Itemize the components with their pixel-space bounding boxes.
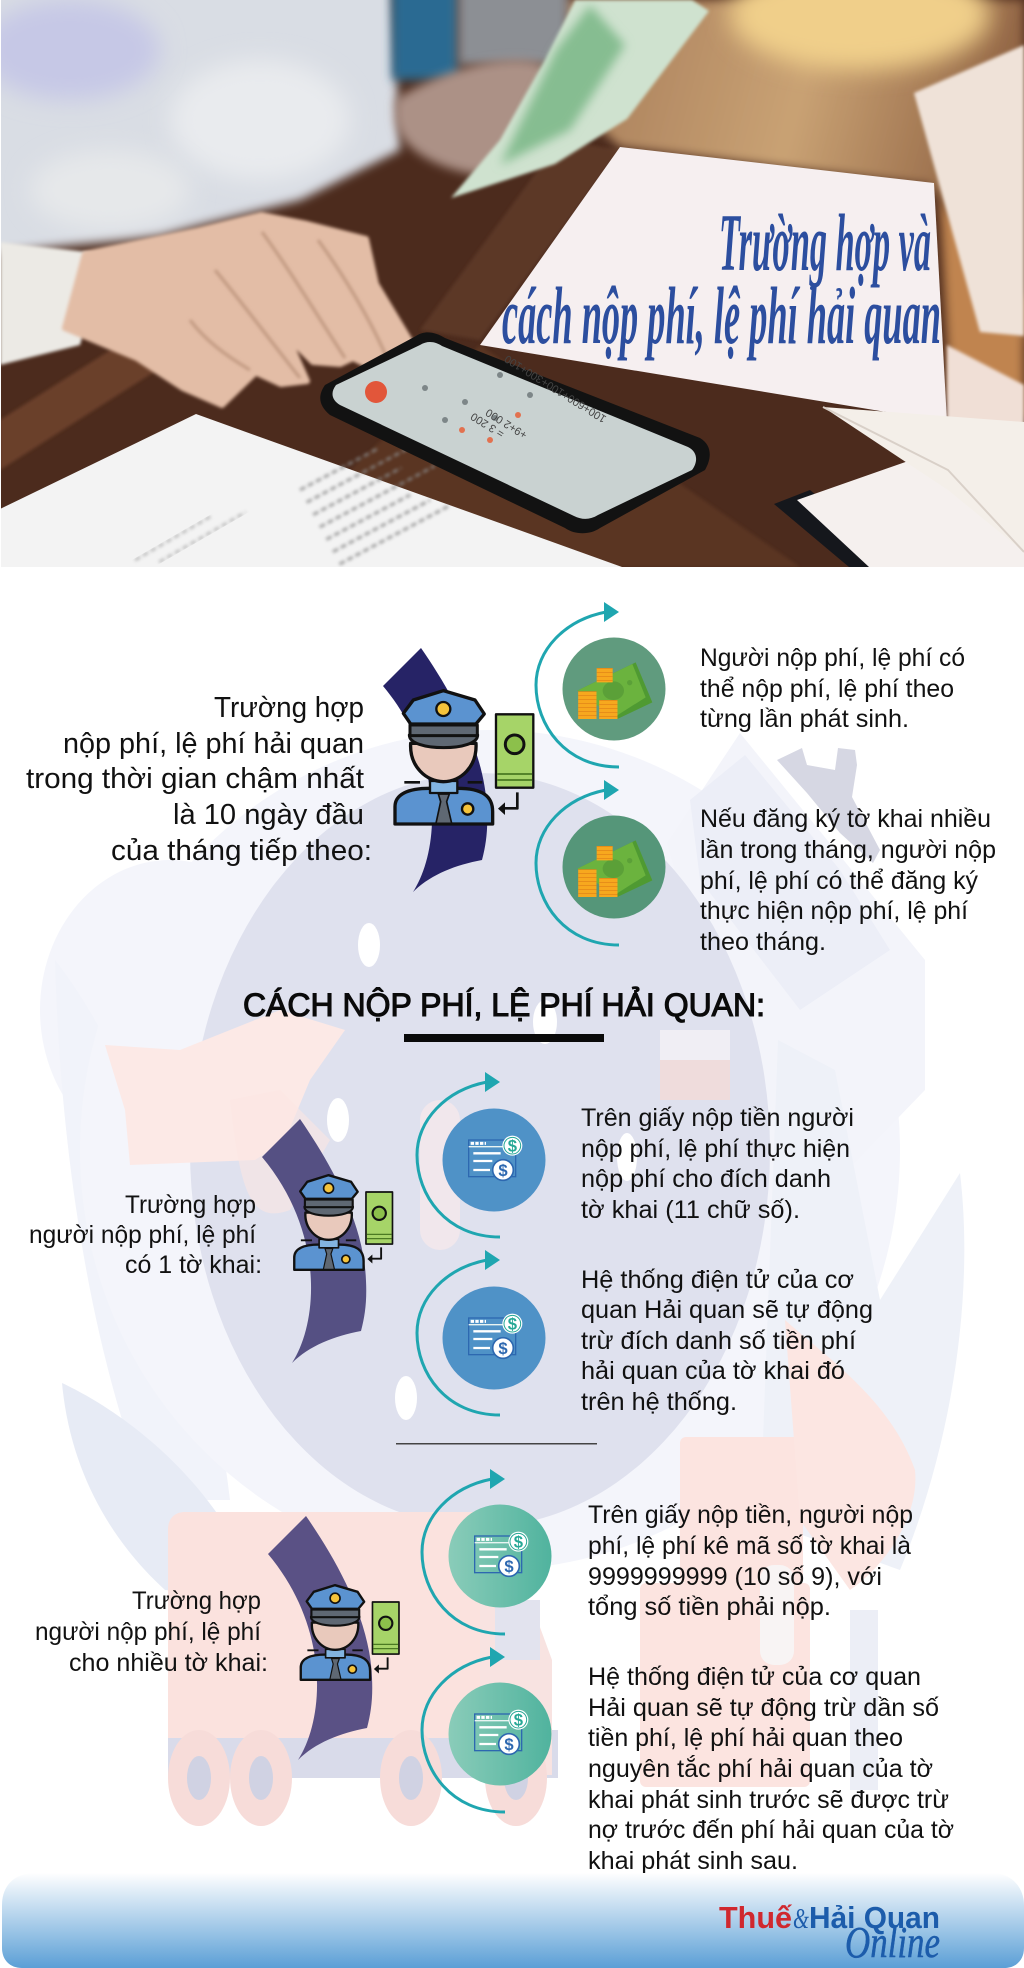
arrow arc 1 <box>536 602 619 767</box>
text: multiple declarations case: người nộp phí, lệ phí <box>35 1618 261 1646</box>
text: monthly option: phí, lệ phí có thể đăng ký <box>700 867 978 895</box>
text: one declaration case: người nộp phí, lệ phí <box>29 1221 256 1249</box>
text: automatic deduction for multiple declarations: nợ trước đến phí hải quan của tờ <box>588 1816 954 1844</box>
smartphone <box>320 332 710 533</box>
text: payment slip for multiple declarations: tổng số tiền phải nộp. <box>588 1593 831 1621</box>
arrow arc 2 <box>536 780 619 945</box>
text: automatic deduction for multiple declarations <box>588 1663 954 1875</box>
text: timing case: trong thời gian chậm nhất <box>26 763 364 795</box>
text: payment slip for one declaration: nộp phí cho đích danh <box>581 1165 831 1193</box>
ribbon behind officer 2 <box>262 1119 366 1363</box>
text: timing case: là 10 ngày đầu <box>173 799 364 831</box>
icon: money circle 2 <box>562 816 666 918</box>
text: option per occurrence <box>700 644 965 733</box>
text: option per occurrence: thể nộp phí, lệ phí theo <box>700 675 954 703</box>
icon: document circle 1 <box>442 1108 546 1212</box>
text: automatic deduction for multiple declarations: khai phát sinh trước sẽ được trừ <box>588 1786 949 1814</box>
text: option per occurrence: Người nộp phí, lệ phí có <box>700 644 965 672</box>
paper on desk <box>480 147 947 422</box>
text: payment slip for multiple declarations: 9999999999 (10 số 9), với <box>588 1563 882 1591</box>
text: payment slip for multiple declarations <box>588 1501 913 1621</box>
ribbon behind officer 1 <box>383 648 487 892</box>
logo: Thuế & Hải Quan Online: Thuế <box>719 1900 793 1935</box>
text: automatic deduction for multiple declarations: tiền phí, lệ phí hải quan theo <box>588 1724 903 1752</box>
logo: Thuế & Hải Quan Online: & <box>793 1904 809 1935</box>
text: monthly option: Nếu đăng ký tờ khai nhiều <box>700 805 991 833</box>
header photo: hands with phone and money on a desk <box>0 0 1024 572</box>
text: payment slip for multiple declarations: phí, lệ phí kê mã số tờ khai là <box>588 1532 911 1560</box>
logo: Thuế & Hải Quan Online: Hải Quan <box>809 1900 940 1935</box>
text: automatic deduction for multiple declarations: Hải quan sẽ tự động trừ dần số <box>588 1694 939 1722</box>
text: automatic deduction for one declaration: Hệ thống điện tử của cơ <box>581 1266 854 1294</box>
logo: Thuế & Hải Quan Online <box>719 1900 940 1967</box>
text: automatic deduction for multiple declarations: khai phát sinh sau. <box>588 1847 798 1875</box>
text: option per occurrence: từng lần phát sinh. <box>700 705 909 733</box>
section: timing of fee payment <box>26 602 996 956</box>
title <box>502 197 941 361</box>
text: multiple declarations case: Trường hợp <box>132 1587 261 1615</box>
text: timing case: nộp phí, lệ phí hải quan <box>63 728 364 760</box>
hand holding money <box>395 0 709 198</box>
icon: money circle 1 <box>562 638 666 740</box>
text: automatic deduction for one declaration: hải quan của tờ khai đó <box>581 1357 845 1385</box>
icon: document circle 3 <box>448 1504 552 1608</box>
footer band <box>2 1873 1024 1968</box>
icon: document circle 2 <box>442 1286 546 1390</box>
truck <box>168 1512 558 1826</box>
text: automatic deduction for multiple declarations: nguyên tắc phí hải quan của tờ <box>588 1754 933 1783</box>
icon: customs officer with money 3 <box>301 1585 399 1680</box>
heading: how to pay: CÁCH NỘP PHÍ, LỆ PHÍ HẢI QUAN: <box>243 987 765 1023</box>
phone screen numbers <box>470 356 606 437</box>
pointing hand and cuff <box>0 215 418 405</box>
phone screen numbers: 100+600+100+300+100 <box>503 352 609 425</box>
phone screen numbers: +9+2 000 <box>484 406 530 441</box>
text: monthly option: lần trong tháng, người nộp <box>700 836 996 864</box>
text: multiple declarations case <box>35 1587 268 1677</box>
text: automatic deduction for one declaration: quan Hải quan sẽ tự động <box>581 1296 873 1324</box>
text: one declaration case: có 1 tờ khai: <box>125 1251 262 1279</box>
text: timing case: Trường hợp <box>214 692 364 724</box>
text: automatic deduction for one declaration: trên hệ thống. <box>581 1388 737 1416</box>
text: payment slip for one declaration: Trên giấy nộp tiền người <box>581 1104 854 1132</box>
ribbon behind officer 3 <box>268 1516 372 1760</box>
phone screen numbers: = 3 200 <box>469 410 507 440</box>
notebook at bottom right <box>774 407 1024 567</box>
logo: Thuế & Hải Quan Online: Online <box>845 1918 940 1967</box>
text: payment slip for one declaration: nộp phí, lệ phí thực hiện <box>581 1135 850 1163</box>
bottom-left printed paper <box>0 414 622 572</box>
text: payment slip for one declaration <box>581 1104 854 1224</box>
icon: customs officer with money 1 <box>395 691 533 824</box>
text: automatic deduction for one declaration: trừ đích danh số tiền phí <box>581 1327 856 1355</box>
text: multiple declarations case: cho nhiều tờ khai: <box>69 1649 268 1677</box>
section: one declaration <box>29 1072 873 1416</box>
heading underline <box>404 1034 604 1042</box>
text: one declaration case: Trường hợp <box>125 1191 256 1219</box>
icon: document circle 4 <box>448 1682 552 1786</box>
text: automatic deduction for multiple declarations: Hệ thống điện tử của cơ quan <box>588 1663 921 1691</box>
arrow arc 5 <box>422 1469 505 1634</box>
arrow arc 3 <box>417 1072 500 1237</box>
icon: customs officer with money 2 <box>294 1175 392 1270</box>
text: one declaration case <box>29 1191 262 1279</box>
shirt <box>0 0 568 255</box>
section: multiple declarations <box>35 1469 954 1875</box>
text: monthly option: theo tháng. <box>700 928 826 956</box>
background watermark illustration <box>40 730 964 1826</box>
text: timing case: của tháng tiếp theo: <box>111 835 372 867</box>
text: timing case <box>26 692 372 867</box>
text: payment slip for multiple declarations: Trên giấy nộp tiền, người nộp <box>588 1501 913 1529</box>
arrow arc 4 <box>417 1250 500 1415</box>
arrow arc 6 <box>422 1647 505 1812</box>
text: payment slip for one declaration: tờ khai (11 chữ số). <box>581 1196 800 1224</box>
text: automatic deduction for one declaration <box>581 1266 873 1416</box>
text: monthly option <box>700 805 996 956</box>
text: monthly option: thực hiện nộp phí, lệ phí <box>700 897 968 925</box>
